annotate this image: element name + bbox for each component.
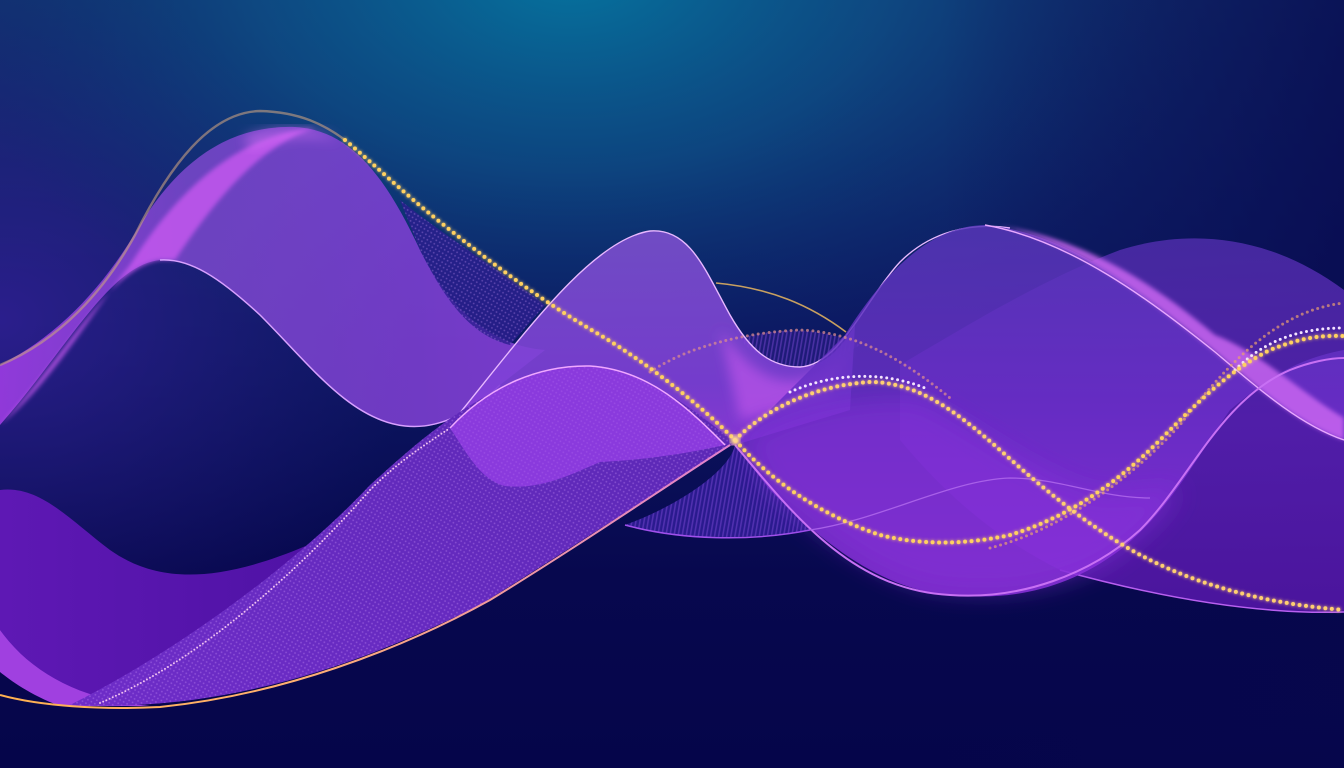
ribbon: right back wave	[900, 238, 1344, 612]
ribbon: upper left main wave	[0, 127, 545, 427]
ribbon: lower left back wave	[0, 480, 430, 706]
dotted line: second gold strand	[735, 382, 1344, 610]
ribbon highlight: top glow	[245, 128, 340, 150]
ribbon: central crest wave	[450, 226, 1010, 487]
ribbon: hatched dark band behind centre	[625, 331, 860, 538]
ribbon fold: lower right magenta sheet	[745, 399, 1180, 592]
ribbon glow: pink base of crest	[720, 330, 850, 420]
dotted line: white strands	[790, 328, 1344, 392]
ribbon edge: dotted pale line	[100, 428, 450, 703]
crossing glow	[730, 435, 740, 445]
thin tan curve: upper left	[0, 111, 345, 365]
ribbon: front meshed sheet	[0, 366, 735, 708]
ribbon fold: bright upper lobe	[450, 366, 725, 487]
ribbon fold: bright right band	[1000, 226, 1344, 440]
ribbon: right large wave	[735, 225, 1344, 597]
dotted line: faint arc centre	[650, 330, 950, 398]
thin tan curve: centre	[716, 283, 846, 332]
ribbon mesh: dark netted fold	[400, 200, 545, 345]
ribbon highlight: left magenta fold	[0, 128, 315, 425]
dotted line: faint right strand	[990, 303, 1344, 548]
ribbon edge: golden lower rim	[0, 445, 730, 708]
dotted line: main gold strand	[345, 140, 1344, 542]
